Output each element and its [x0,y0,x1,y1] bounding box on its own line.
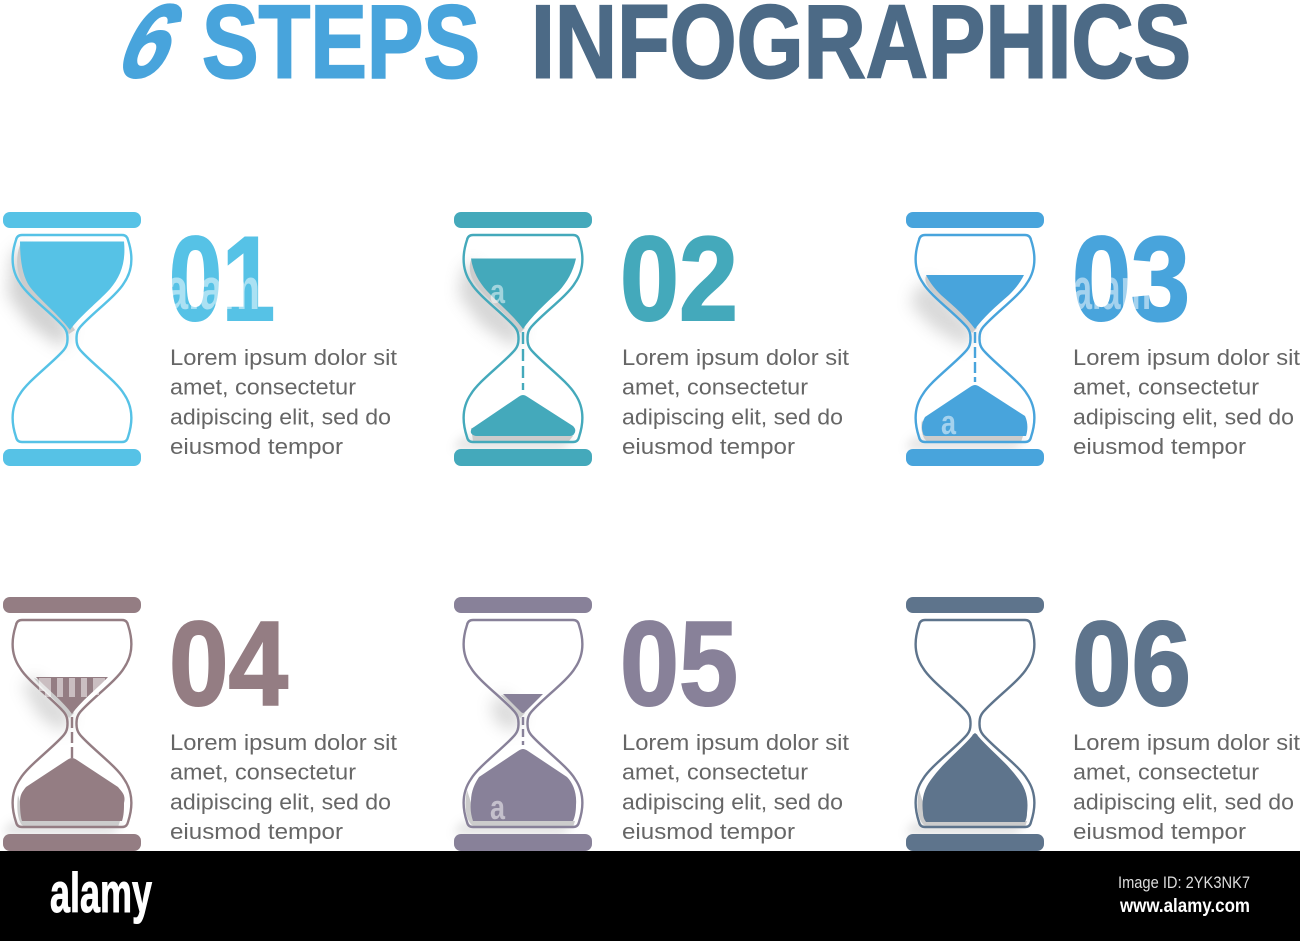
text 03: eiusmod tempor [1073,434,1246,459]
text 05: eiusmod tempor [622,819,795,844]
footer logo: alamy [50,861,152,924]
text 01: adipiscing elit, sed do [170,404,391,430]
text 04: amet, consectetur [170,760,356,784]
text 02: Lorem ipsum dolor sit [622,345,849,370]
hourglass 01 [3,212,141,466]
text 04: eiusmod tempor [170,819,343,844]
text 03: amet, consectetur [1073,374,1259,400]
text 06: Lorem ipsum dolor sit [1073,730,1300,755]
hourglass 02 [453,212,592,466]
text 02: eiusmod tempor [622,434,795,459]
hourglass 02: a [490,273,506,311]
hourglass 03: a [941,404,957,442]
number 04: 04 [169,597,288,731]
panel: step 02 [453,212,849,466]
title [102,0,1191,100]
hourglass 06 [905,597,1044,851]
text 05: adipiscing elit, sed do [622,790,843,814]
text 06: amet, consectetur [1073,760,1259,784]
panel: step 05 [453,597,849,851]
number 02: 02 [620,212,738,346]
text 06 [1073,730,1300,844]
text 03: Lorem ipsum dolor sit [1073,345,1300,370]
watermark: alam [1073,257,1151,322]
text 06: eiusmod tempor [1073,819,1246,844]
hourglass 04 [2,597,141,851]
text 02: adipiscing elit, sed do [622,404,843,430]
text 03: adipiscing elit, sed do [1073,404,1294,430]
text 01: eiusmod tempor [170,434,343,459]
watermark: alam [165,257,260,322]
text 06: adipiscing elit, sed do [1073,790,1294,814]
panel: step 04 [2,597,397,851]
panel: step 01 [3,212,397,466]
footer bar [0,851,1300,941]
number 01: 01 [169,212,275,346]
text 01: Lorem ipsum dolor sit [170,345,397,370]
text 05 [622,730,849,844]
number 06: 06 [1072,597,1191,731]
text 05: Lorem ipsum dolor sit [622,730,849,755]
text 03 [1073,345,1300,459]
panel: step 06 [905,597,1300,851]
text 02 [622,345,849,459]
text 05: amet, consectetur [622,760,808,784]
number 05: 05 [620,597,738,731]
text 04 [170,730,397,844]
text 01 [170,345,397,459]
footer url: www.alamy.com [1119,896,1250,917]
text 04: Lorem ipsum dolor sit [170,730,397,755]
hourglass 03 [905,212,1044,466]
text 01: amet, consectetur [170,374,356,400]
text 04: adipiscing elit, sed do [170,790,391,814]
image id: Image ID: 2YK3NK7 [1118,873,1250,892]
panel: step 03 [905,212,1300,466]
hourglass 05 [453,597,592,851]
hourglass 05: a [490,789,506,827]
number 03: 03 [1072,212,1190,346]
text 02: amet, consectetur [622,374,808,400]
